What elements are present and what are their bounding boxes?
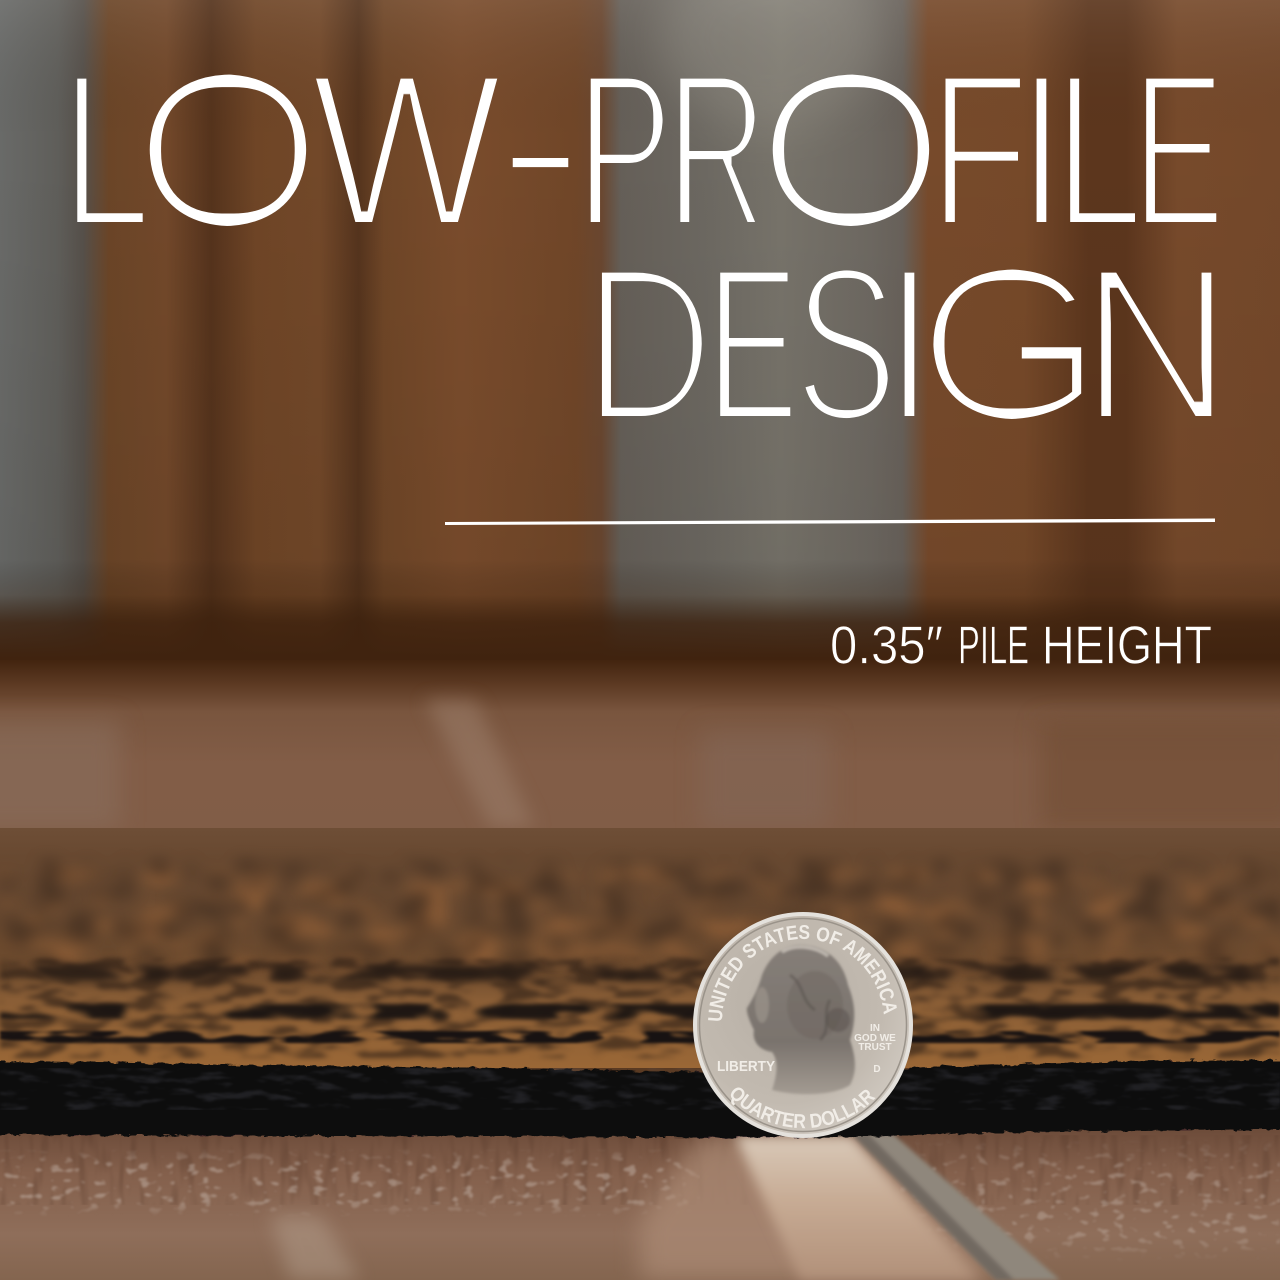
title line 1: O <box>132 27 324 273</box>
pile height label: PILE <box>958 616 1029 676</box>
title line 2: S <box>795 221 897 467</box>
title line 2: I <box>892 221 927 467</box>
pile height label: HEIGHT <box>1042 616 1212 676</box>
rug mid-tone patches in the focus zone <box>0 958 1280 1058</box>
title line 1 <box>61 22 1224 273</box>
rug surface with woven pattern <box>0 828 1280 1068</box>
title line 1: L <box>61 27 151 273</box>
black braided rug edge <box>0 1060 1280 1137</box>
coin legend: top: UNITED STATES OF AMERICA <box>708 925 897 1021</box>
rug dark row three <box>0 1031 1280 1043</box>
coin inner rim <box>700 918 906 1132</box>
coin word: liberty: LIBERTY <box>717 1058 775 1075</box>
coin portrait of Washington <box>747 945 855 1094</box>
title line 1: W <box>310 27 503 273</box>
title line 2: E <box>707 221 798 467</box>
rug dark row one <box>0 965 1280 981</box>
title line 2: D <box>583 221 714 467</box>
pile height label: 0.35″ <box>830 616 943 676</box>
wall and curtains (blurred vertical stripes) <box>0 0 1280 700</box>
coin motto <box>854 1023 896 1075</box>
title line 1: O <box>755 27 947 273</box>
coin legend: bottom: QUARTER DOLLAR <box>730 1088 876 1128</box>
icon: quarter dollar coin <box>693 912 913 1138</box>
title line 1: L <box>1054 27 1144 273</box>
blurred floor behind the rug <box>0 660 1280 832</box>
rug dark row two <box>0 1004 1280 1019</box>
title line 2 <box>583 221 1233 467</box>
rug blurred tan patches <box>0 870 1280 970</box>
coin motto: IN <box>870 1023 880 1034</box>
title: LOW-PROFILE DESIGN <box>61 22 1233 467</box>
title line 1: F <box>928 27 1029 273</box>
floor in the foreground <box>0 1128 1280 1280</box>
title line 2: N <box>1080 221 1233 467</box>
title line 1: P <box>577 27 672 273</box>
coin motto: TRUST <box>858 1042 892 1053</box>
title line 1: R <box>667 27 767 273</box>
coin body <box>695 914 911 1136</box>
title line 1: - <box>489 22 592 268</box>
title line 1: I <box>1024 27 1059 273</box>
coin motto: GOD WE <box>854 1033 896 1044</box>
rug blurred dark patches <box>0 860 1280 965</box>
coin motto: D <box>873 1064 881 1075</box>
title line 2: G <box>915 221 1105 467</box>
title line 1: E <box>1133 27 1224 273</box>
